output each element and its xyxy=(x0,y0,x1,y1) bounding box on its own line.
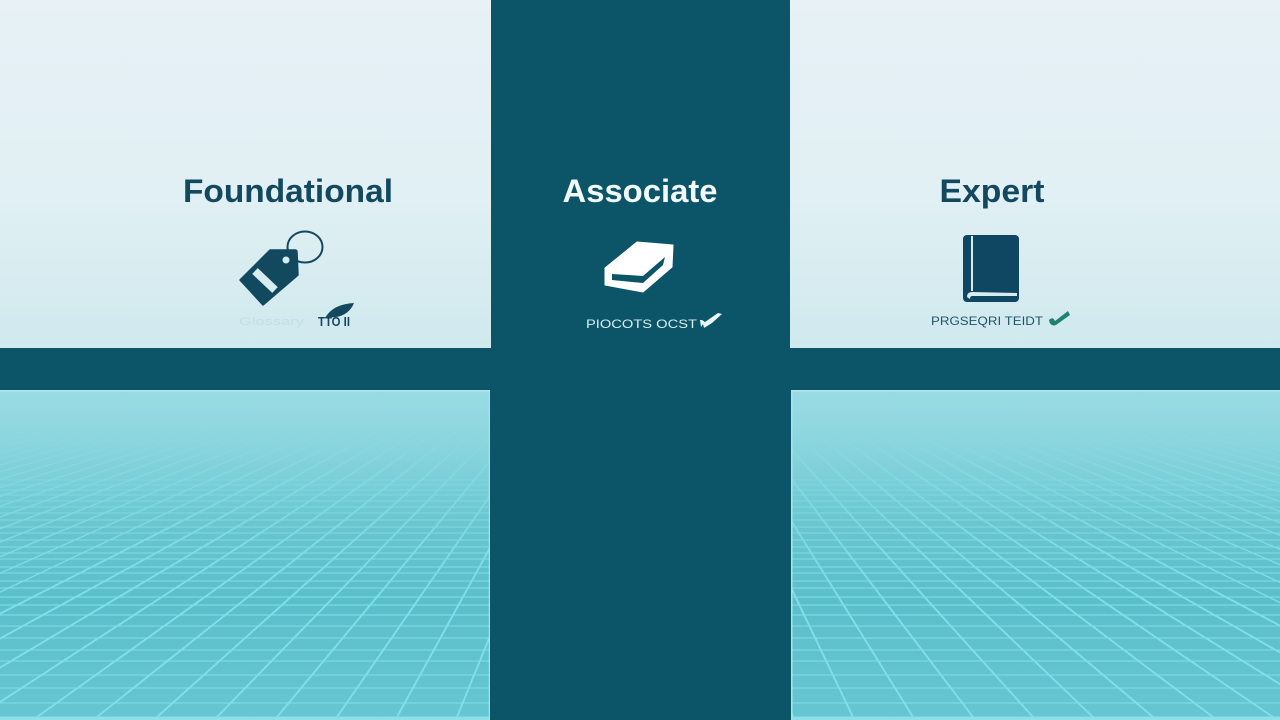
panel: foundational top xyxy=(0,0,491,348)
panel: left perspective grid floor xyxy=(0,390,490,720)
caption: expert label with check: PRGSEQRI TEIDT xyxy=(931,316,1043,328)
heading: Foundational: Foundational xyxy=(183,173,393,209)
caption: associate label with check: PIOCOTS OCST xyxy=(586,319,697,331)
icon: upright dark book xyxy=(963,235,1019,302)
caption: foundational label with feather: Glossary xyxy=(239,316,305,328)
caption: associate label with check xyxy=(586,313,722,331)
panel: expert top xyxy=(790,0,1280,348)
caption: expert label with check xyxy=(931,311,1070,328)
caption: foundational label with feather xyxy=(239,303,354,329)
caption: foundational label with feather: TTO II xyxy=(318,314,350,329)
icon: closed white book xyxy=(605,242,673,292)
panel: right perspective grid floor xyxy=(791,390,1280,720)
icon: price tag xyxy=(240,232,322,305)
heading: Associate: Associate xyxy=(562,173,718,209)
heading: Expert: Expert xyxy=(940,173,1045,209)
